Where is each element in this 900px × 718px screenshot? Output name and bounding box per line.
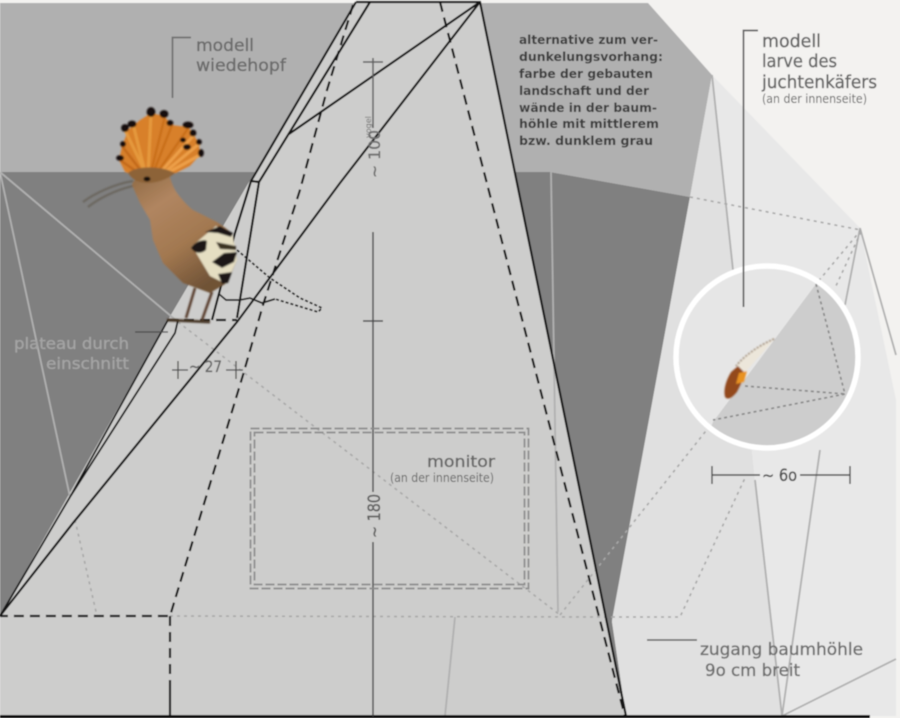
dimension: height 100: ~ 100 (365, 130, 384, 178)
label: plateau durch einschnitt: einschnitt (46, 354, 129, 373)
bird crest tips (116, 107, 204, 182)
icon: hoopoe bird (83, 107, 237, 322)
dashed fold lines (0, 2, 625, 716)
monitor frame (250, 428, 528, 588)
bird legs (186, 288, 212, 320)
dimension: 60 (712, 466, 850, 486)
dimension: 27: ~ 27 (189, 357, 222, 376)
bottom edge (0, 715, 870, 718)
text block: alternative zum verdunkelungsvorhang: dunkelungsvorhang: (519, 49, 663, 64)
bird beak (83, 181, 133, 207)
text block: alternative zum verdunkelungsvorhang: farbe der gebauten (519, 66, 653, 81)
heading: modell larve des juchtenkaefers (744, 30, 877, 307)
bird body (132, 174, 237, 293)
inset circle: larva (673, 263, 861, 451)
heading: modell wiedehopf: modell (196, 36, 254, 56)
bird crest (119, 113, 200, 177)
text block: alternative zum verdunkelungsvorhang: wände in der baum- (519, 100, 657, 115)
tree hollow outline (0, 2, 626, 716)
dimension: 27 (172, 357, 243, 379)
text block: alternative zum verdunkelungsvorhang: höhle mit mittlerem (519, 116, 659, 131)
bird wing (191, 226, 237, 284)
label: plateau durch einschnitt: plateau durch (14, 334, 129, 353)
text block: alternative zum verdunkelungsvorhang (519, 32, 663, 148)
background: dark grey landscape left (0, 172, 255, 616)
dimension: height 100: vogel (364, 116, 373, 138)
dimension: height 100 (363, 58, 384, 178)
dimension: height 180: ~ 180 (365, 494, 385, 538)
icon: larva (724, 339, 774, 399)
text block: alternative zum verdunkelungsvorhang: landschaft und der (519, 83, 650, 98)
panel: tree hollow body (0, 2, 626, 716)
monitor label: (an der innenseite) (390, 471, 494, 485)
panel: right facet (612, 75, 782, 716)
background: dark grey landscape right (515, 172, 690, 716)
label: zugang baumhoehle: zugang baumhöhle (700, 640, 863, 660)
heading: modell larve des juchtenkaefers: juchtenkäfers (761, 73, 877, 93)
heading: modell wiedehopf (172, 36, 287, 98)
monitor label: monitor (427, 452, 495, 471)
heading: modell larve des juchtenkaefers: larve des (762, 52, 837, 72)
dimension: height 180 (363, 232, 385, 716)
heading: modell larve des juchtenkaefers: modell (762, 32, 821, 52)
monitor label (390, 452, 495, 485)
dimension: 60: ~ 6o (762, 466, 797, 486)
label: plateau durch einschnitt (14, 332, 168, 373)
text block: alternative zum verdunkelungsvorhang: alternative zum ver- (519, 32, 658, 47)
label: zugang baumhoehle (647, 640, 863, 681)
text block: alternative zum verdunkelungsvorhang: bzw. dunklem grau (519, 133, 653, 148)
background: upper grey wall (0, 3, 712, 197)
heading: modell larve des juchtenkaefers: (an der innenseite) (762, 92, 867, 106)
label: zugang baumhoehle: 9o cm breit (705, 661, 800, 681)
icon: hoopoe tail outline (219, 250, 322, 312)
heading: modell wiedehopf: wiedehopf (196, 56, 287, 76)
panel: right light facet (712, 75, 896, 716)
